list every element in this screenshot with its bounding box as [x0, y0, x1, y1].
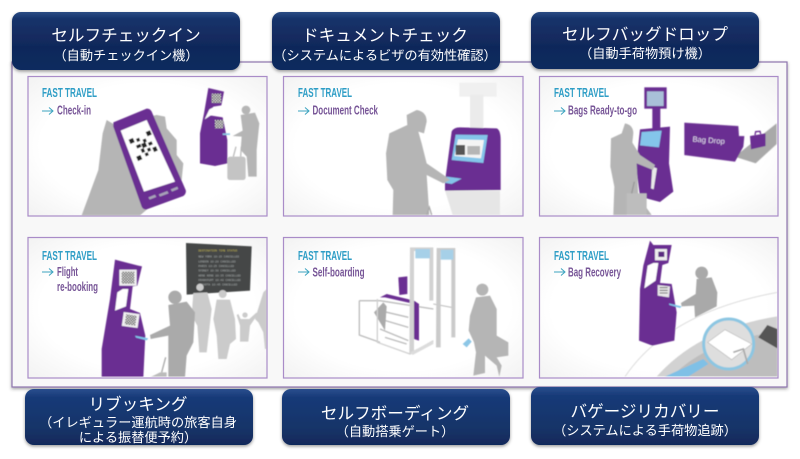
re-booking illustration: LONDON 10:20 CANCELLED	[198, 260, 236, 263]
label: fast travel check-in	[42, 85, 97, 118]
label: fast travel flight re-booking	[42, 248, 98, 294]
label: fast travel flight re-booking: Flight	[57, 264, 78, 279]
heading: rebooking: （イレギュラー運航時の旅客自身	[39, 415, 237, 430]
label: fast travel bags ready-to-go: Bags Ready-to-go	[568, 102, 637, 118]
label: fast travel self-boarding: FAST TRAVEL	[298, 248, 352, 263]
label: fast travel document check: Document Check	[312, 102, 378, 118]
heading: rebooking: リブッキング	[88, 394, 188, 414]
label: fast travel check-in: Check-in	[57, 102, 91, 118]
heading: self bag drop: セルフバッグドロップ	[562, 25, 728, 44]
bag drop illustration: Bag Drop	[692, 135, 725, 146]
heading: self check-in: （自動チェックイン機）	[53, 48, 199, 63]
label: fast travel self-boarding: Self-boarding	[312, 264, 365, 280]
heading: document check: （システムによるビザの有効性確認）	[273, 48, 497, 63]
panel: bags ready-to-go	[540, 76, 778, 216]
heading: baggage recovery	[531, 387, 759, 445]
heading: self boarding: セルフボーディング	[321, 403, 469, 423]
re-booking illustration: FRANKFURT 10:40 CANCELLED	[198, 279, 241, 282]
bag recovery illustration	[625, 241, 777, 377]
panel: check-in	[28, 76, 267, 216]
re-booking illustration: NEW YORK 10:15 CANCELLED	[198, 256, 239, 259]
panel: document check	[284, 76, 523, 216]
label: fast travel bag recovery: Bag Recovery	[568, 264, 621, 280]
label: fast travel flight re-booking: re-booking	[57, 279, 98, 294]
check-in illustration	[82, 88, 259, 215]
label: fast travel document check: FAST TRAVEL	[298, 85, 352, 100]
panel: bag recovery	[540, 238, 778, 378]
heading: self boarding	[282, 389, 510, 445]
label: fast travel check-in: FAST TRAVEL	[42, 85, 97, 100]
heading: document check	[272, 12, 500, 70]
heading: self check-in	[12, 12, 240, 70]
panel: flight re-booking	[28, 238, 267, 378]
label: fast travel document check	[298, 85, 378, 118]
re-booking illustration: PARIS 10:25 CANCELLED	[198, 265, 234, 268]
re-booking illustration: JAKARTA 10:45 CANCELLED	[198, 284, 238, 287]
heading: rebooking	[25, 389, 253, 445]
re-booking illustration	[102, 243, 267, 377]
label: fast travel self-boarding	[298, 248, 365, 280]
heading: rebooking: による振替便予約）	[79, 430, 197, 445]
label: fast travel flight re-booking: FAST TRAVEL	[42, 248, 97, 263]
bag drop illustration	[610, 87, 777, 215]
re-booking illustration: DESTINATION TIME STATUS	[198, 250, 238, 253]
label: fast travel bags ready-to-go: FAST TRAVEL	[554, 85, 609, 100]
heading: document check: ドキュメントチェック	[302, 26, 468, 45]
re-booking illustration: SYDNEY 10:30 CANCELLED	[198, 270, 236, 273]
heading: baggage recovery: バゲージリカバリー	[570, 402, 720, 421]
label: fast travel bag recovery	[554, 248, 621, 280]
self-boarding gate illustration	[359, 247, 508, 377]
heading: self check-in: セルフチェックイン	[51, 26, 201, 45]
heading: self bag drop	[531, 12, 759, 69]
heading: self boarding: （自動搭乗ゲート）	[336, 423, 454, 439]
panel: self-boarding	[284, 238, 523, 378]
label: fast travel bag recovery: FAST TRAVEL	[554, 248, 609, 263]
heading: baggage recovery: （システムによる手荷物追跡）	[553, 423, 737, 438]
document check illustration	[386, 83, 501, 215]
heading: self bag drop: （自動手荷物預け機）	[579, 46, 711, 61]
outer frame	[12, 62, 787, 387]
label: fast travel bags ready-to-go	[554, 85, 637, 118]
re-booking illustration: HONG KONG 10:35 CANCELLED	[198, 274, 241, 277]
